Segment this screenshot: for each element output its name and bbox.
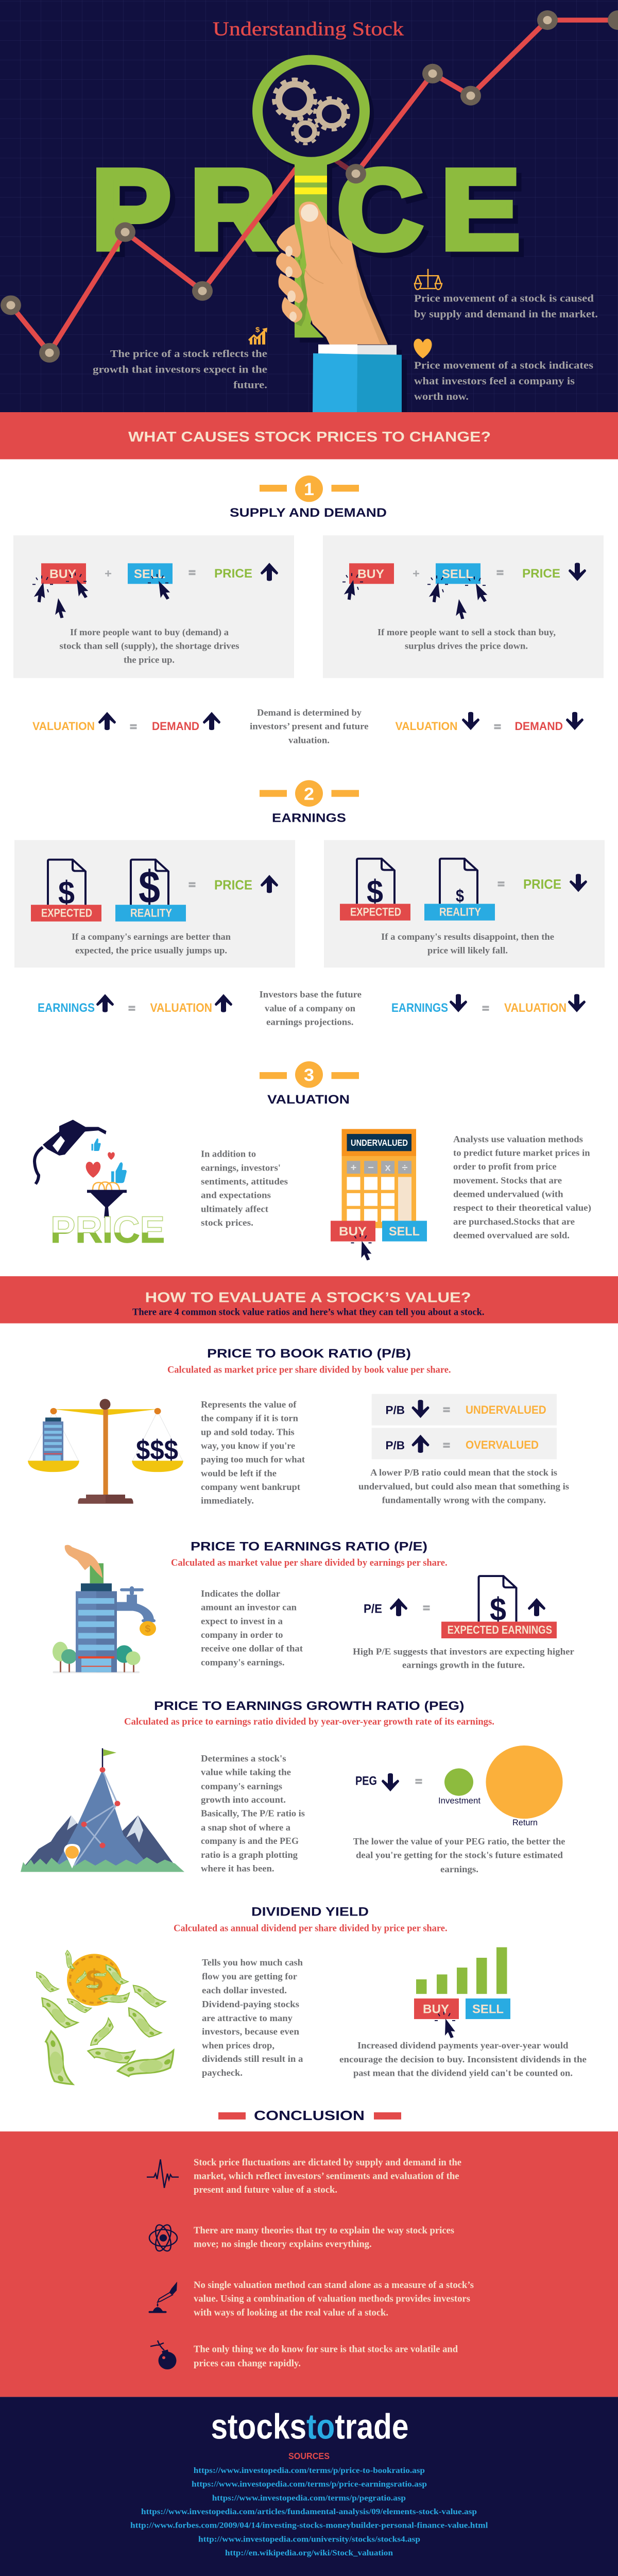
buy button: BUY	[423, 2003, 449, 2016]
buy button: BUY	[357, 567, 384, 581]
sources list: http://en.wikipedia.org/wiki/Stock_valuation	[225, 2548, 393, 2557]
text: analysts	[453, 1134, 591, 1241]
number keys	[347, 1177, 411, 1225]
equation row: earnings and valuation: EARNINGS	[391, 1001, 448, 1015]
text: company worth: what investors feel a company is	[414, 376, 575, 387]
equation: PEG down equals investment vs return: PEG	[355, 1774, 377, 1788]
equation: PEG down equals investment vs return	[355, 1745, 563, 1827]
section 1 number badge: 1	[304, 480, 314, 499]
text: P/E description: company in order to	[201, 1630, 283, 1640]
text: P/B description: Represents the value of	[201, 1399, 297, 1410]
panel: more sellers	[323, 535, 604, 678]
word PRICE: PRICE	[91, 146, 520, 274]
text: expected, the price usually jumps up.	[75, 945, 227, 956]
equation row: earnings and valuation: Investors base the future	[259, 990, 362, 1000]
gold coin: $	[85, 1964, 103, 1997]
text: analysts: order to profit from price	[453, 1162, 557, 1172]
building	[76, 1583, 117, 1672]
reality document	[115, 860, 186, 922]
text: dividend description: Dividend-paying stocks	[202, 1999, 299, 2010]
text: P/E meaning	[353, 1647, 574, 1670]
subheading: P/B formula: Calculated as market price per share divided by book value per share.	[167, 1365, 451, 1375]
calculator screen	[347, 1134, 411, 1151]
plus sign: +	[413, 567, 420, 580]
text: dividend meaning: past mean that the dividend yield can't be counted on.	[353, 2068, 573, 2078]
icon: scale	[415, 269, 442, 290]
text: PEG description: ratio is a graph plotting	[201, 1850, 298, 1860]
banner: what causes stock prices to change	[0, 412, 618, 459]
sell button	[382, 1221, 427, 1242]
hero panel	[0, 0, 618, 412]
text: P/B description: way, you know if you're	[201, 1440, 295, 1451]
text: dividend description	[202, 1958, 303, 2078]
text: PEG description: company's earnings	[201, 1781, 282, 1792]
equation row: earnings and valuation: VALUATION	[504, 1001, 566, 1015]
illustration: building faucet	[53, 1545, 156, 1673]
operator keys	[347, 1161, 411, 1174]
sources list: https://www.investopedia.com/terms/p/pegratio.asp	[212, 2493, 406, 2502]
banner: how to evaluate a stock's value: HOW TO EVALUATE A STOCK’S VALUE?	[145, 1289, 471, 1305]
price up	[214, 563, 278, 581]
text: If a company's results disappoint, then the	[381, 931, 554, 942]
equation: P/E up equals expected earnings up	[364, 1576, 557, 1638]
magnifying glass	[252, 55, 374, 343]
hand holding magnifier	[276, 201, 393, 349]
text: stock than sell (supply), the shortage drives	[59, 641, 239, 651]
text: theories: move; no single theory explains everything.	[194, 2239, 372, 2249]
equation row: earnings and valuation	[38, 990, 586, 1027]
text: If more people want to buy (demand) a	[70, 627, 229, 638]
reality document: $	[139, 861, 160, 913]
section 1 number badge	[260, 476, 359, 502]
panel: conclusion	[0, 2131, 618, 2397]
equation row: valuation and demand: investors’ present and future	[250, 721, 368, 732]
expected document: EXPECTED	[41, 907, 92, 919]
text: supply and demand	[414, 293, 598, 320]
icon: heart	[414, 339, 432, 359]
text: fluctuations: present and future value of a stock.	[194, 2185, 337, 2195]
heading: price to earnings ratio: PRICE TO EARNINGS RATIO (P/E)	[191, 1540, 427, 1553]
price down: PRICE	[523, 877, 561, 892]
heading: dividend yield: DIVIDEND YIELD	[251, 1905, 369, 1919]
price down	[523, 874, 587, 892]
funnel	[87, 1190, 127, 1218]
text: company worth	[414, 360, 593, 402]
text: PEG meaning: The lower the value of your PEG ratio, the better the	[353, 1836, 565, 1847]
text: dividend meaning: encourage the decision to buy. Inconsistent dividends in the	[339, 2054, 587, 2065]
text: If more people want to sell a stock than buy,	[377, 627, 556, 638]
text: P/E description: Indicates the dollar	[201, 1588, 280, 1599]
expected document	[340, 859, 410, 921]
coin: $	[145, 1623, 151, 1634]
building on left pan	[43, 1417, 63, 1461]
title: Understanding Stock	[213, 18, 404, 40]
equals sign	[188, 882, 196, 887]
buy button: BUY	[339, 1225, 367, 1239]
line chart	[1, 10, 618, 363]
panel: earnings beat	[14, 840, 295, 968]
sources list	[130, 2465, 488, 2557]
subheading: PEG formula: Calculated as price to earnings ratio divided by year-over-year growth rate of its earnings.	[124, 1717, 494, 1727]
text: no single method: No single valuation method can stand alone as a measure of a stock’s	[194, 2280, 474, 2291]
price down: PRICE	[522, 567, 560, 581]
section 2 number badge: 2	[304, 784, 314, 804]
illustration: balance scale	[28, 1399, 183, 1504]
word PRICE half filled: PRICE	[50, 1209, 165, 1250]
return circle	[486, 1745, 563, 1827]
heading: earnings: EARNINGS	[272, 811, 346, 825]
text: volatile: prices can change rapidly.	[194, 2358, 301, 2369]
text: volatile: The only thing we do know for sure is that stocks are volatile and	[194, 2344, 458, 2355]
icon: atom	[149, 2223, 177, 2253]
sell button	[436, 563, 480, 584]
shirt cuff and sleeve	[313, 345, 407, 412]
sell button: SELL	[389, 1225, 420, 1239]
sources list: https://www.investopedia.com/terms/p/price-to-bookratio.asp	[194, 2465, 425, 2475]
box: P/B up equals overvalued	[372, 1428, 557, 1459]
equation row: valuation and demand: Demand is determined by	[257, 707, 362, 718]
equation: P/E up equals expected earnings up: EXPECTED EARNINGS	[448, 1624, 552, 1636]
buy button: BUY	[49, 567, 76, 581]
text: P/E description: amount an investor can	[201, 1602, 297, 1613]
equation row: earnings and valuation: earnings projections.	[266, 1017, 353, 1027]
cursors	[342, 573, 489, 619]
text: P/E meaning: High P/E suggests that investors are expecting higher	[353, 1647, 574, 1657]
text: analysts: deemed undervalued (with	[453, 1189, 563, 1199]
price up	[214, 875, 278, 893]
investment circle	[438, 1768, 480, 1806]
text: PEG description: company is and the PEG	[201, 1836, 299, 1846]
price down	[522, 563, 586, 581]
text: P/E description: expect to invest in a	[201, 1616, 283, 1626]
investment circle: Investment	[438, 1796, 480, 1806]
text: analysts: movement. Stocks that are	[453, 1175, 562, 1186]
heading: PEG: PRICE TO EARNINGS GROWTH RATIO (PEG)	[154, 1700, 464, 1713]
text: growth expectations: growth that investors expect in the	[93, 364, 267, 375]
return circle: Return	[512, 1818, 538, 1827]
text: sentiments: In addition to	[201, 1149, 256, 1160]
text: no single method: value. Using a combination of valuation methods provides investors	[194, 2294, 470, 2304]
text: P/B description: immediately.	[201, 1496, 254, 1506]
text: dividend description: flow you are getting for	[202, 1971, 297, 1982]
thumbs up and hearts	[86, 1139, 127, 1183]
text: dividend description: Tells you how much cash	[202, 1958, 303, 1968]
text: P/E description	[201, 1588, 303, 1668]
text: sentiments: earnings, investors'	[201, 1163, 281, 1173]
illustration: calculator: ÷	[402, 1162, 408, 1173]
illustration: fuel nozzle pouring into funnel	[35, 1120, 165, 1250]
subheading: P/E formula: Calculated as market value per share divided by earnings per share.	[171, 1557, 448, 1568]
buy button	[41, 563, 86, 584]
text: dividend description: when prices drop,	[202, 2040, 274, 2051]
text: fluctuations: Stock price fluctuations are dictated by supply and demand in the	[194, 2157, 461, 2168]
hand and banknote	[65, 1545, 104, 1583]
box: P/B down equals undervalued	[372, 1394, 557, 1426]
equation row: valuation and demand: DEMAND	[152, 720, 199, 733]
section 3 number badge	[260, 1061, 359, 1088]
text: company worth: Price movement of a stock indicates	[414, 360, 593, 371]
text: P/B description: the company if it is torn	[201, 1413, 299, 1424]
expected document: EXPECTED	[350, 906, 401, 918]
text: PEG description	[201, 1753, 305, 1874]
text: sentiments: sentiments, attitudes	[201, 1176, 288, 1187]
heading: valuation: VALUATION	[267, 1093, 350, 1107]
icon: ink dropper	[148, 2282, 177, 2313]
cursor	[435, 2012, 456, 2039]
equation row: earnings and valuation: VALUATION	[150, 1001, 212, 1015]
cursor	[351, 1234, 372, 1261]
reality document: REALITY	[130, 907, 172, 919]
text: PEG meaning: earnings.	[440, 1864, 478, 1875]
text: supply and demand: Price movement of a stock is caused	[414, 293, 594, 304]
plus sign: +	[105, 567, 112, 580]
section 3 number badge: 3	[304, 1065, 314, 1085]
text: P/B description: company went bankrupt	[201, 1482, 301, 1493]
text: PEG description: value while taking the	[201, 1767, 291, 1778]
text: no single method	[194, 2280, 474, 2318]
reality document	[424, 859, 495, 921]
equals sign	[496, 570, 504, 575]
heading: conclusion: CONCLUSION	[254, 2108, 365, 2123]
panel: more buyers	[13, 535, 294, 678]
icon: bomb	[150, 2341, 176, 2369]
text: theories	[194, 2225, 454, 2249]
sell button: SELL	[442, 567, 473, 581]
text: fluctuations	[194, 2157, 461, 2195]
nozzle	[35, 1120, 107, 1184]
equation row: valuation and demand: VALUATION	[395, 720, 457, 733]
text: PEG meaning	[353, 1836, 565, 1875]
sell button	[466, 1998, 510, 2019]
buy button	[414, 1998, 459, 2019]
heading: supply and demand: SUPPLY AND DEMAND	[230, 506, 387, 520]
bar chart: rising dividends	[416, 1947, 507, 1994]
faucet	[117, 1586, 156, 1622]
text: analysts: respect to their theoretical value)	[453, 1203, 591, 1213]
text: P/B meaning: A lower P/B ratio could mean that the stock is	[370, 1467, 557, 1478]
text: dividend description: paycheck.	[202, 2068, 243, 2078]
box: P/B up equals overvalued: P/B	[385, 1439, 405, 1452]
reality document: REALITY	[439, 906, 481, 918]
text: PEG description: Basically, The P/E ratio is	[201, 1808, 305, 1819]
text	[72, 931, 231, 956]
buy button	[331, 1221, 375, 1242]
price up: PRICE	[214, 877, 252, 893]
equation row: valuation and demand: valuation.	[288, 735, 330, 745]
heading: conclusion	[218, 2108, 401, 2123]
gears	[274, 79, 349, 144]
text: no single method: with ways of looking at the real value of a stock.	[194, 2308, 388, 2318]
text: supply and demand: by supply and demand in the market.	[414, 309, 598, 320]
text: P/B description: paying too much for what	[201, 1454, 305, 1465]
box: P/B down equals undervalued: UNDERVALUED	[466, 1403, 546, 1416]
sell button	[128, 563, 173, 584]
text	[377, 627, 556, 651]
sources heading: SOURCES	[288, 2451, 330, 2461]
box: P/B up equals overvalued: OVERVALUED	[466, 1438, 539, 1451]
panel: earnings miss	[324, 840, 605, 968]
word PRICE half filled: PRICE	[50, 1209, 165, 1250]
text: price will likely fall.	[427, 945, 508, 956]
subheading: dividend formula: Calculated as annual dividend per share divided by price per share.	[174, 1923, 448, 1934]
banner: how to evaluate a stock's value: There are 4 common stock value ratios and here’s what they can tell you about a stock.	[132, 1307, 485, 1317]
sell button: SELL	[134, 567, 165, 581]
cursors	[32, 572, 172, 618]
word PRICE half filled	[53, 1216, 164, 1243]
text: growth expectations	[93, 348, 267, 391]
text: PEG description: where it has been.	[201, 1863, 274, 1874]
text: analysts: to predict future market prices in	[453, 1148, 590, 1158]
sell button: SELL	[472, 2003, 504, 2016]
expected document	[31, 860, 101, 922]
text: growth expectations: The price of a stock reflects the	[110, 348, 267, 360]
text: company worth: worth now.	[414, 392, 469, 402]
footer	[0, 2397, 618, 2576]
text: dividend description: investors, because even	[202, 2026, 300, 2037]
text: P/B meaning: fundamentally wrong with the company.	[382, 1495, 546, 1505]
banner: what causes stock prices to change: WHAT CAUSES STOCK PRICES TO CHANGE?	[128, 429, 491, 445]
text: sentiments: ultimately affect	[201, 1204, 269, 1214]
text: fluctuations: market, which reflect investors’ sentiments and evaluation of the	[194, 2171, 459, 2181]
coils	[93, 1182, 119, 1190]
box: P/B down equals undervalued: P/B	[385, 1404, 405, 1416]
logo: stockstotrade	[211, 2406, 408, 2446]
illustration: calculator: x	[385, 1162, 391, 1173]
text: analysts: deemed overvalued are sold.	[453, 1230, 570, 1241]
icon: heartbeat line	[147, 2159, 179, 2188]
heading: price to book ratio: PRICE TO BOOK RATIO (P/B)	[207, 1347, 411, 1361]
text: theories: There are many theories that try to explain the way stock prices	[194, 2225, 454, 2236]
reality document: $	[456, 886, 464, 906]
text: volatile	[194, 2344, 458, 2369]
text: P/B description: would be left if the	[201, 1468, 277, 1479]
banner: how to evaluate a stock's value	[0, 1276, 618, 1324]
equation row: earnings and valuation: EARNINGS	[38, 1001, 95, 1015]
text: P/E description: company's earnings.	[201, 1657, 284, 1668]
text: dividend description: each dollar invested.	[202, 1985, 287, 1996]
location pin	[64, 1844, 80, 1869]
buy button	[349, 563, 394, 584]
text: P/B meaning: undervalued, but could also mean that something is	[358, 1481, 569, 1492]
illustration: calculator: +	[351, 1162, 356, 1173]
text: PEG description: Determines a stock's	[201, 1753, 286, 1764]
coin	[140, 1621, 156, 1636]
text: analysts: are purchased.Stocks that are	[453, 1216, 575, 1227]
text: sentiments: and expectations	[201, 1190, 271, 1201]
text: If a company's earnings are better than	[72, 931, 231, 942]
illustration: coin and flying money	[29, 1950, 181, 2092]
text: PEG meaning: deal you're getting for the stock's future estimated	[356, 1850, 563, 1861]
text: growth expectations: future.	[233, 380, 267, 391]
calculator screen: UNDERVALUED	[351, 1138, 408, 1148]
equation: P/E up equals expected earnings up: $	[490, 1591, 506, 1628]
text: PEG description: growth into account.	[201, 1794, 286, 1805]
illustration: mountain	[21, 1748, 184, 1872]
illustration: calculator: −	[368, 1162, 374, 1173]
text: the price up.	[124, 655, 175, 665]
text: dividend meaning	[339, 2040, 587, 2078]
text: dividend description: dividends still result in a	[202, 2054, 303, 2064]
text: surplus drives the price down.	[405, 641, 528, 651]
sources list: https://www.investopedia.com/terms/p/price-earningsratio.asp	[192, 2479, 427, 2489]
trees	[53, 1642, 140, 1672]
equation: P/E up equals expected earnings up: P/E	[364, 1602, 382, 1616]
gold coin	[67, 1954, 122, 2006]
banknotes	[29, 1950, 181, 2092]
text: P/B description	[201, 1399, 305, 1506]
illustration: calculator	[331, 1129, 427, 1261]
text: dividend description: are attractive to many	[202, 2013, 293, 2024]
text: P/B meaning	[358, 1467, 569, 1505]
expected document: $	[367, 874, 383, 910]
sources list: http://www.investopedia.com/university/stocks/stocks4.asp	[198, 2534, 420, 2544]
expected document: $	[58, 875, 75, 911]
equation row: valuation and demand	[32, 707, 583, 745]
text: analysts: Analysts use valuation methods	[453, 1134, 583, 1145]
text: P/E meaning: earnings growth in the future.	[402, 1660, 525, 1670]
text: dividend meaning: Increased dividend payments year-over-year would	[357, 2040, 569, 2051]
equals sign	[188, 570, 196, 575]
equals sign	[497, 882, 505, 886]
dollars on right pan: $$$	[136, 1434, 178, 1465]
price up: PRICE	[214, 567, 252, 581]
sources list: http://www.forbes.com/2009/04/14/investing-stocks-moneybuilder-personal-finance-value.html	[130, 2520, 488, 2530]
equation row: valuation and demand: DEMAND	[514, 720, 563, 733]
sources list: https://www.investopedia.com/articles/fundamental-analysis/09/elements-stock-value.asp	[141, 2506, 477, 2516]
text	[381, 931, 554, 956]
equation row: earnings and valuation: value of a company on	[265, 1003, 356, 1014]
text: sentiments	[201, 1149, 288, 1228]
text: sentiments: stock prices.	[201, 1217, 253, 1228]
text: P/E description: receive one dollar of that	[201, 1643, 303, 1654]
icon: growth chart	[248, 326, 267, 345]
section 2 number badge	[260, 780, 359, 807]
icon: growth chart: $	[255, 326, 260, 334]
equation row: valuation and demand: VALUATION	[32, 720, 95, 733]
text	[59, 627, 239, 665]
text: PEG description: a snap shot of where a	[201, 1822, 290, 1833]
text: P/B description: up and sold today. This	[201, 1427, 295, 1437]
